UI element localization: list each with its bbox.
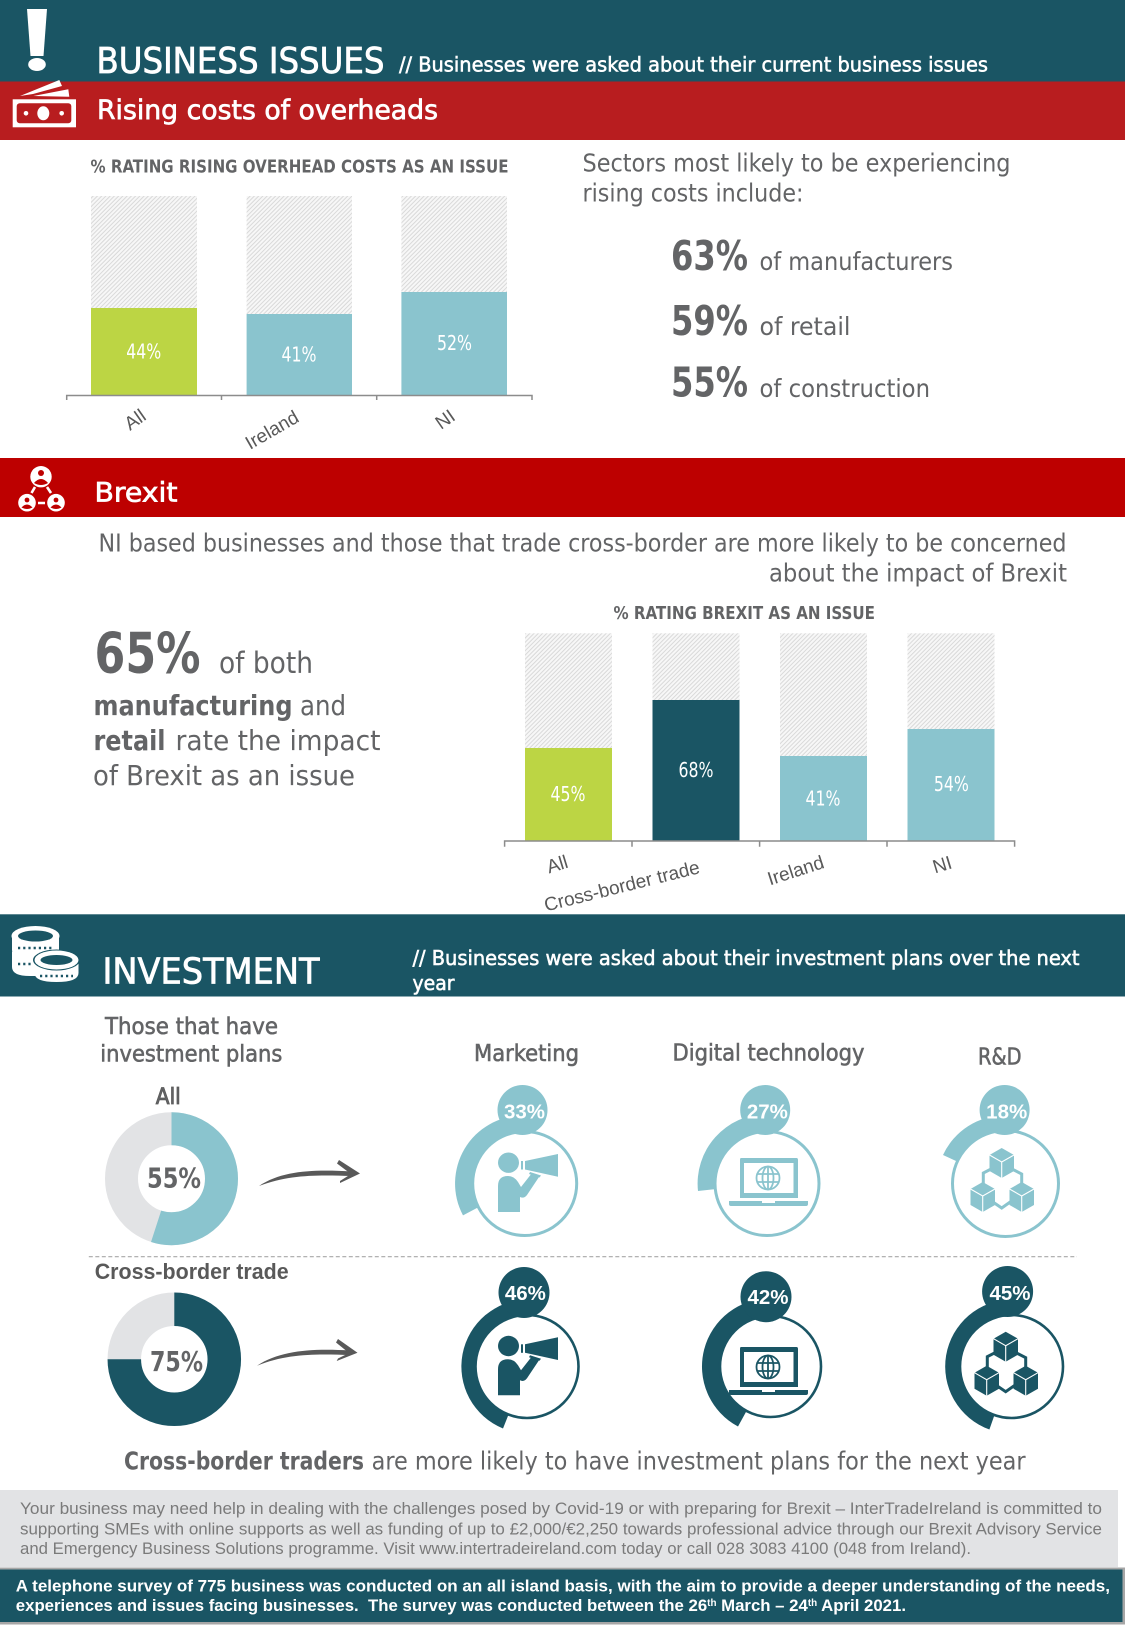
donut chart: cross-border trade 75%: 75% <box>150 1345 203 1378</box>
panel: survey methodology: A telephone survey of 775 business was conducted on an all island basis, with the aim to provide a deeper understanding of the needs, <box>16 1577 1110 1596</box>
axis labels: Ireland <box>765 852 827 890</box>
chart axis <box>505 841 1015 847</box>
bar: ireland 41% <box>247 196 352 395</box>
donut chart: all 55% <box>122 1129 222 1229</box>
radial stat: r&d 45% <box>945 1266 1063 1430</box>
icon: laptop with globe <box>729 1158 808 1206</box>
radial stat: marketing 46%: 46% <box>505 1282 546 1305</box>
radial stat: marketing 33% <box>455 1085 577 1236</box>
panel: survey methodology: th <box>707 1598 716 1609</box>
column heading: digital technology: Digital technology <box>672 1040 864 1066</box>
callout: 65% of both manufacturing and retail: of both <box>219 646 313 680</box>
axis labels: Cross-border trade <box>542 857 702 916</box>
subtitle: investment <box>412 946 1080 995</box>
column heading: marketing: Marketing <box>474 1041 579 1067</box>
heading: those that have investment plans <box>100 1014 282 1068</box>
icon: exclamation mark <box>27 9 47 71</box>
panel: support information: Your business may need help in dealing with the challenges posed by Covid-19 or with preparing for Brexit – InterTradeIreland is committed to <box>20 1499 1102 1518</box>
stat: 55% construction <box>671 359 930 407</box>
subtitle: investment: // Businesses were asked about their investment plans over the next <box>412 946 1080 970</box>
axis labels: All <box>544 852 571 878</box>
bar: cross-border trade 68% <box>652 633 740 840</box>
bar: all 44% <box>91 196 197 395</box>
subtitle: investment: year <box>412 971 455 995</box>
chart axis <box>67 396 532 400</box>
panel: survey methodology <box>0 1568 1125 1624</box>
icon: coins <box>11 926 80 982</box>
panel: survey methodology: experiences and issues facing businesses. The survey was conducted between the 26 <box>16 1596 717 1615</box>
axis labels: NI <box>432 406 459 434</box>
stat: 63% manufacturers: 63% <box>671 232 748 280</box>
bar: ni 54%: 54% <box>934 772 969 796</box>
icon: connected cubes <box>970 1148 1034 1212</box>
axis labels <box>121 406 459 454</box>
bar: ni 52% <box>401 196 507 395</box>
callout: 65% of both manufacturing and retail: 65% <box>94 622 200 687</box>
axis labels <box>542 852 955 916</box>
icon: connected people <box>18 466 65 512</box>
text block: ni based businesses: about the impact of Brexit <box>769 559 1067 588</box>
text block: ni based businesses: NI based businesses and those that trade cross-border are more likely to be concerned <box>98 529 1066 558</box>
chart title: % RATING RISING OVERHEAD COSTS AS AN ISSUE <box>90 157 508 178</box>
stat: 55% construction: of construction <box>760 374 930 403</box>
row label: all: All <box>156 1085 181 1110</box>
radial stat: digital technology 42%: 42% <box>747 1286 789 1309</box>
radial stat: r&d 18% <box>943 1085 1058 1236</box>
heading: brexit: Brexit <box>94 478 178 509</box>
radial stat: r&d 45%: 45% <box>989 1282 1031 1305</box>
takeaway: cross-border traders: are more likely to have investment plans for the next year <box>372 1446 1027 1475</box>
section band: brexit <box>0 458 1125 517</box>
text block: sectors most likely to experience rising costs: Sectors most likely to be experiencing <box>582 149 1010 178</box>
donut chart: all 55%: 55% <box>147 1161 201 1194</box>
stat: 59% retail: 59% <box>671 297 748 345</box>
stat: 63% manufacturers <box>671 232 953 280</box>
title: business issues: BUSINESS ISSUES <box>96 41 384 82</box>
callout: 65% of both manufacturing and retail: manufacturing <box>94 689 292 722</box>
title: investment: INVESTMENT <box>102 951 320 992</box>
row label: cross-border trade: Cross-border trade <box>95 1259 289 1284</box>
icon: connected cubes <box>974 1332 1038 1396</box>
icon: person with megaphone <box>498 1336 558 1395</box>
icon: banknotes <box>13 80 76 127</box>
callout: 65% of both manufacturing and retail: retail <box>94 724 166 757</box>
axis labels: All <box>121 406 150 435</box>
text block: sectors most likely to experience rising costs <box>582 149 1010 407</box>
heading: those that have investment plans: investment plans <box>100 1042 282 1068</box>
donut chart: cross-border trade 75% <box>124 1309 224 1409</box>
callout: 65% of both manufacturing and retail: of Brexit as an issue <box>93 759 355 792</box>
header band: business issues <box>0 0 1125 82</box>
icon: laptop with globe <box>729 1347 808 1395</box>
heading: rising costs of overheads: Rising costs of overheads <box>97 95 438 126</box>
takeaway: cross-border traders: Cross-border traders <box>124 1446 364 1475</box>
column heading: r&d: R&D <box>978 1044 1022 1070</box>
heading: those that have investment plans: Those that have <box>104 1014 278 1040</box>
callout: 65% of both manufacturing and retail: and <box>300 689 346 722</box>
panel: survey methodology: th <box>808 1598 817 1609</box>
icon: person with megaphone <box>498 1152 558 1212</box>
radial stat: digital technology 27%: 27% <box>747 1100 788 1123</box>
bar: ireland 41%: 41% <box>282 342 316 366</box>
radial stat: digital technology 42% <box>702 1271 821 1426</box>
bar: ireland 41% <box>780 633 867 840</box>
bar: ni 54% <box>908 633 994 840</box>
axis labels: Ireland <box>242 407 303 454</box>
arrow: cross-border row <box>257 1339 358 1366</box>
bar: all 45% <box>525 633 612 840</box>
text block: sectors most likely to experience rising costs: rising costs include: <box>582 179 804 208</box>
chart title: % RATING BREXIT AS AN ISSUE <box>614 603 875 624</box>
bar chart: brexit as an issue <box>505 603 1015 916</box>
bar: all 44%: 44% <box>126 340 161 364</box>
radial stat: r&d 18%: 18% <box>986 1100 1027 1123</box>
radial stat: digital technology 27% <box>698 1085 819 1236</box>
bar: ni 52%: 52% <box>437 331 472 355</box>
stat: 55% construction: 55% <box>671 359 748 407</box>
text block: ni based businesses <box>98 529 1067 588</box>
panel: support information: and Emergency Business Solutions programme. Visit www.intertradeireland.com today or call 028 3083 4100 (048 from Ireland). <box>20 1539 971 1558</box>
bar: ireland 41%: 41% <box>806 786 840 810</box>
radial stat: marketing 33%: 33% <box>504 1100 545 1123</box>
callout: 65% of both manufacturing and retail <box>93 622 381 792</box>
panel: survey methodology: April 2021. <box>817 1596 906 1615</box>
bar chart: rising overhead costs <box>67 157 532 454</box>
radial stat: marketing 46% <box>461 1267 578 1428</box>
arrow: all row <box>259 1160 360 1186</box>
header band: investment <box>0 914 1125 996</box>
panel: survey methodology: March – 24 <box>716 1596 808 1615</box>
bar: cross-border trade 68%: 68% <box>678 758 714 782</box>
subtitle: business issues: // Businesses were asked about their current business issues <box>399 53 988 77</box>
axis labels: NI <box>930 853 955 878</box>
stat: 63% manufacturers: of manufacturers <box>760 247 953 276</box>
panel: support information <box>0 1490 1118 1567</box>
panel: support information: supporting SMEs with online supports as well as funding of up to £2,000/€2,250 towards professional advice through our Brexit Advisory Service <box>20 1519 1102 1538</box>
callout: 65% of both manufacturing and retail: rate the impact <box>176 724 381 757</box>
stat: 59% retail <box>671 297 850 345</box>
section band: rising costs of overheads <box>0 80 1125 140</box>
bar: all 45%: 45% <box>550 782 586 806</box>
stat: 59% retail: of retail <box>760 312 850 341</box>
